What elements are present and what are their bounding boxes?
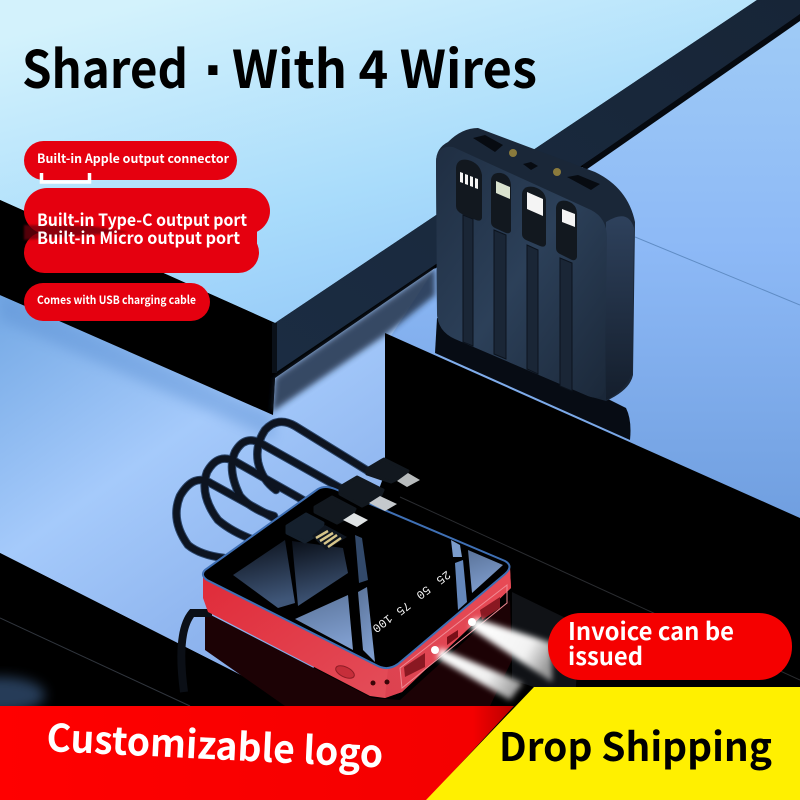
side faces <box>203 568 511 698</box>
straps <box>463 215 572 391</box>
battery display digits: 100 <box>369 611 395 635</box>
shadow reflection under bank <box>205 600 512 706</box>
product: red power bank <box>176 422 552 706</box>
pill: USB cable <box>24 283 210 321</box>
battery display digits: 75 <box>393 598 413 618</box>
pill: Apple connector: Built-in Apple output connector <box>37 148 230 167</box>
connector: USB <box>287 514 347 550</box>
battery display digits: 25 <box>433 567 453 587</box>
banner: drop shipping <box>426 687 800 800</box>
front face <box>436 147 607 398</box>
reflected cable <box>181 613 212 692</box>
connector: Lightning <box>315 497 368 527</box>
banner: drop shipping: Drop Shipping <box>499 717 772 773</box>
title: With 4 Wires <box>232 28 537 103</box>
pill: Type-C and Micro: Built-in Micro output port <box>37 225 240 249</box>
title: Shared <box>22 28 188 103</box>
panel: feature labels <box>24 141 270 321</box>
reflection <box>435 318 630 440</box>
silhouette and top face <box>436 128 635 401</box>
top ports and LEDs <box>473 135 600 190</box>
flashlight beams <box>437 618 552 700</box>
connector contacts <box>460 172 575 227</box>
cable loops behind bank <box>176 422 368 558</box>
title: · <box>203 41 223 101</box>
power button and ports <box>334 585 507 688</box>
battery display digits: 50 <box>413 582 433 602</box>
pill: USB cable: Comes with USB charging cable <box>37 292 196 308</box>
callout: invoice: issued <box>568 637 643 672</box>
callout: invoice: Invoice can be <box>568 612 734 647</box>
callout: invoice <box>548 612 792 680</box>
pill: Apple connector <box>24 141 237 180</box>
product: navy power bank <box>435 128 635 440</box>
connector: Type-C <box>340 477 397 511</box>
decorative white bracket <box>42 173 90 182</box>
glass screen <box>203 487 509 668</box>
banner: customizable logo: Customizable logo <box>45 707 385 778</box>
banner: customizable logo <box>0 706 514 800</box>
connector: Micro <box>367 459 420 487</box>
pill: Type-C and Micro <box>24 188 270 273</box>
battery display digits <box>369 567 453 635</box>
pill: Type-C and Micro: Built-in Type-C output port <box>37 207 247 231</box>
screen windows <box>233 535 503 662</box>
side face <box>606 216 634 400</box>
connector heads <box>456 160 577 260</box>
